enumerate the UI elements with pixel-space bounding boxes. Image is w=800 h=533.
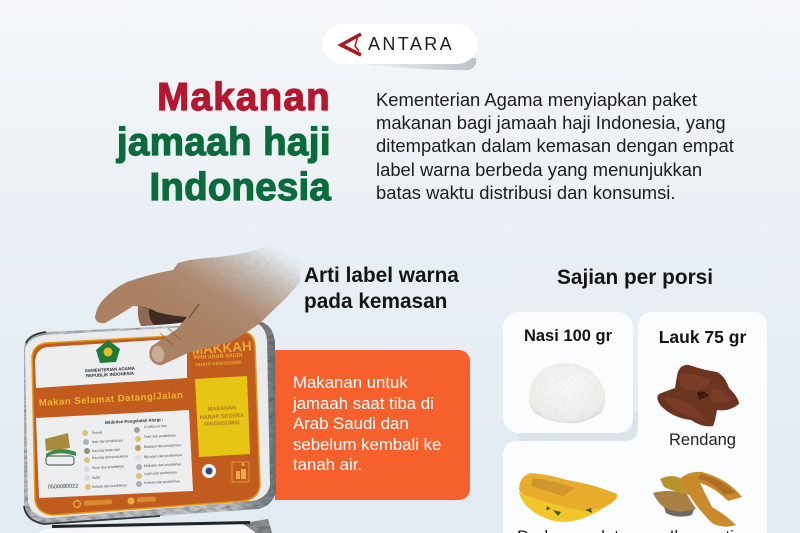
curled fingers in shadow [138, 306, 190, 326]
tray dark rim [24, 332, 160, 524]
label text: KEMENTERIAN AGAMA [85, 366, 136, 373]
allergen list: Moluska dan produknya [144, 462, 181, 468]
Makkah text: PPIH ARAB SAUDI [193, 353, 243, 361]
thumbnail [151, 345, 165, 363]
intro text: Kementerian Agama menyiapkan paket [376, 89, 697, 110]
title [116, 76, 332, 209]
white panel bottom [36, 410, 193, 498]
logo at left of lower panel: 0500090022 [48, 483, 78, 491]
intro text [376, 89, 734, 203]
label text: REPUBLIK INDONESIA [86, 371, 135, 378]
hand [95, 232, 300, 365]
illustration: hand holding food tray [23, 247, 300, 533]
tray foil [24, 322, 276, 524]
logo at left of lower panel [45, 433, 78, 491]
bin icon [232, 462, 249, 482]
heading: label meaning: pada kemasan [304, 290, 447, 313]
title: jamaah haji [117, 121, 331, 164]
description text: tanah air. [293, 455, 362, 474]
food photo: rice [529, 363, 605, 424]
intro text: ditempatkan dalam kemasan dengan empat [376, 135, 734, 156]
emblem [96, 340, 120, 363]
Makkah text: MAKKAH [191, 338, 252, 358]
yellow box text [200, 405, 244, 428]
palm, index finger and thumb [95, 232, 300, 365]
description text: sebelum kembali ke [293, 435, 441, 454]
allergen list: Kacang dan produknya [92, 454, 128, 460]
yellow box text: MAKANAN [208, 405, 236, 413]
title: Makanan [157, 76, 331, 119]
Makkah text: TAHUN 1446H/2025M [195, 360, 241, 367]
description text [292, 373, 441, 474]
card backgrounds [503, 312, 767, 533]
yellow box text: DIKONSUMSI [204, 420, 240, 428]
intro text: makanan bagi jamaah haji Indonesia, yang [376, 112, 726, 133]
allergen list: Susu dan produknya [92, 464, 124, 470]
halal seal [202, 464, 216, 478]
allergen list: Sereal [92, 430, 102, 435]
allergen list: Biji wijen dan produknya [144, 453, 182, 459]
banner text: Makan Selamat Datang/Jalan [39, 390, 184, 409]
panel: orange label description [275, 350, 470, 500]
allergen list: Selada dan produknya [92, 483, 127, 489]
allergen list: Kacang tanah dan [92, 448, 120, 453]
food photo: fried fish [653, 472, 742, 527]
Makkah text [191, 338, 252, 367]
tray lid [25, 323, 270, 518]
logo: ANTARA [323, 24, 477, 70]
label: Nasi: Nasi 100 gr [524, 327, 612, 345]
heading: label meaning: Arti label warna [304, 264, 459, 287]
intro text: label warna berbeda yang menunjukkan [376, 159, 702, 180]
caption: Rendang: Rendang [669, 431, 736, 449]
footer contact icons [74, 500, 80, 508]
yellow box text: HARAP SEGERA [200, 413, 244, 421]
label: orange sticker [32, 332, 260, 515]
food photo: rendang [657, 364, 739, 426]
allergen list: Mustard dan produknya [144, 443, 181, 449]
heading: serving: Sajian per porsi [557, 266, 713, 289]
allergen list: Kedelai dan produknya [144, 479, 180, 485]
description text: Makanan untuk [293, 373, 408, 392]
allergen list: Lupin dan produknya [144, 470, 177, 476]
allergen list: Crustacea dan [144, 424, 167, 429]
description text: Arab Saudi dan [293, 414, 409, 433]
allergen list: Sulfit [92, 476, 100, 480]
label: Lauk: Lauk 75 gr [659, 327, 746, 347]
title: Indonesia [150, 166, 331, 209]
yellow box [195, 376, 250, 457]
allergen icons [82, 427, 142, 490]
white panel top [35, 338, 187, 388]
heading: label meaning [304, 264, 459, 313]
label text [85, 366, 136, 378]
food photo: omelette [519, 473, 618, 522]
description text: jamaah saat tiba di [293, 394, 434, 413]
allergen heading: Bildirilen Pengelolah Alergi : [105, 417, 164, 425]
lower tray peeking out [38, 519, 272, 533]
allergen list [92, 424, 182, 489]
panel: food cards [503, 312, 767, 533]
logo: ANTARA: ANTARA [368, 34, 454, 54]
intro text: batas waktu distribusi dan konsumsi. [376, 182, 676, 203]
allergen list: Ikan dan produknya [92, 438, 123, 444]
knuckle folds [160, 328, 181, 346]
allergen list: Telur dan produknya [144, 433, 176, 439]
